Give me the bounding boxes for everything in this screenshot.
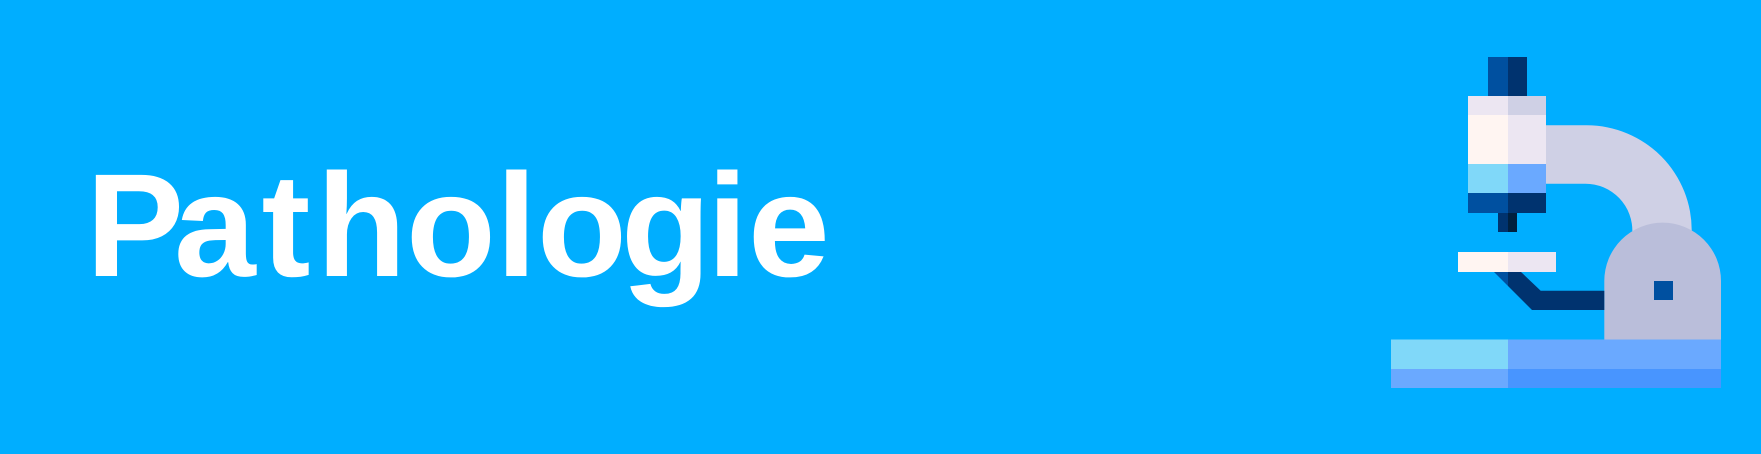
microscope tube xyxy=(1468,96,1546,213)
objective lens xyxy=(1498,213,1517,232)
eyepiece xyxy=(1488,57,1527,96)
title: Pathologie xyxy=(86,144,830,308)
microscope stage xyxy=(1458,252,1556,272)
microscope base xyxy=(1391,340,1721,388)
microscope foot xyxy=(1604,223,1721,340)
stage bracket xyxy=(1494,272,1604,310)
microscope arm xyxy=(1546,125,1692,233)
icon: microscope xyxy=(1391,57,1721,388)
